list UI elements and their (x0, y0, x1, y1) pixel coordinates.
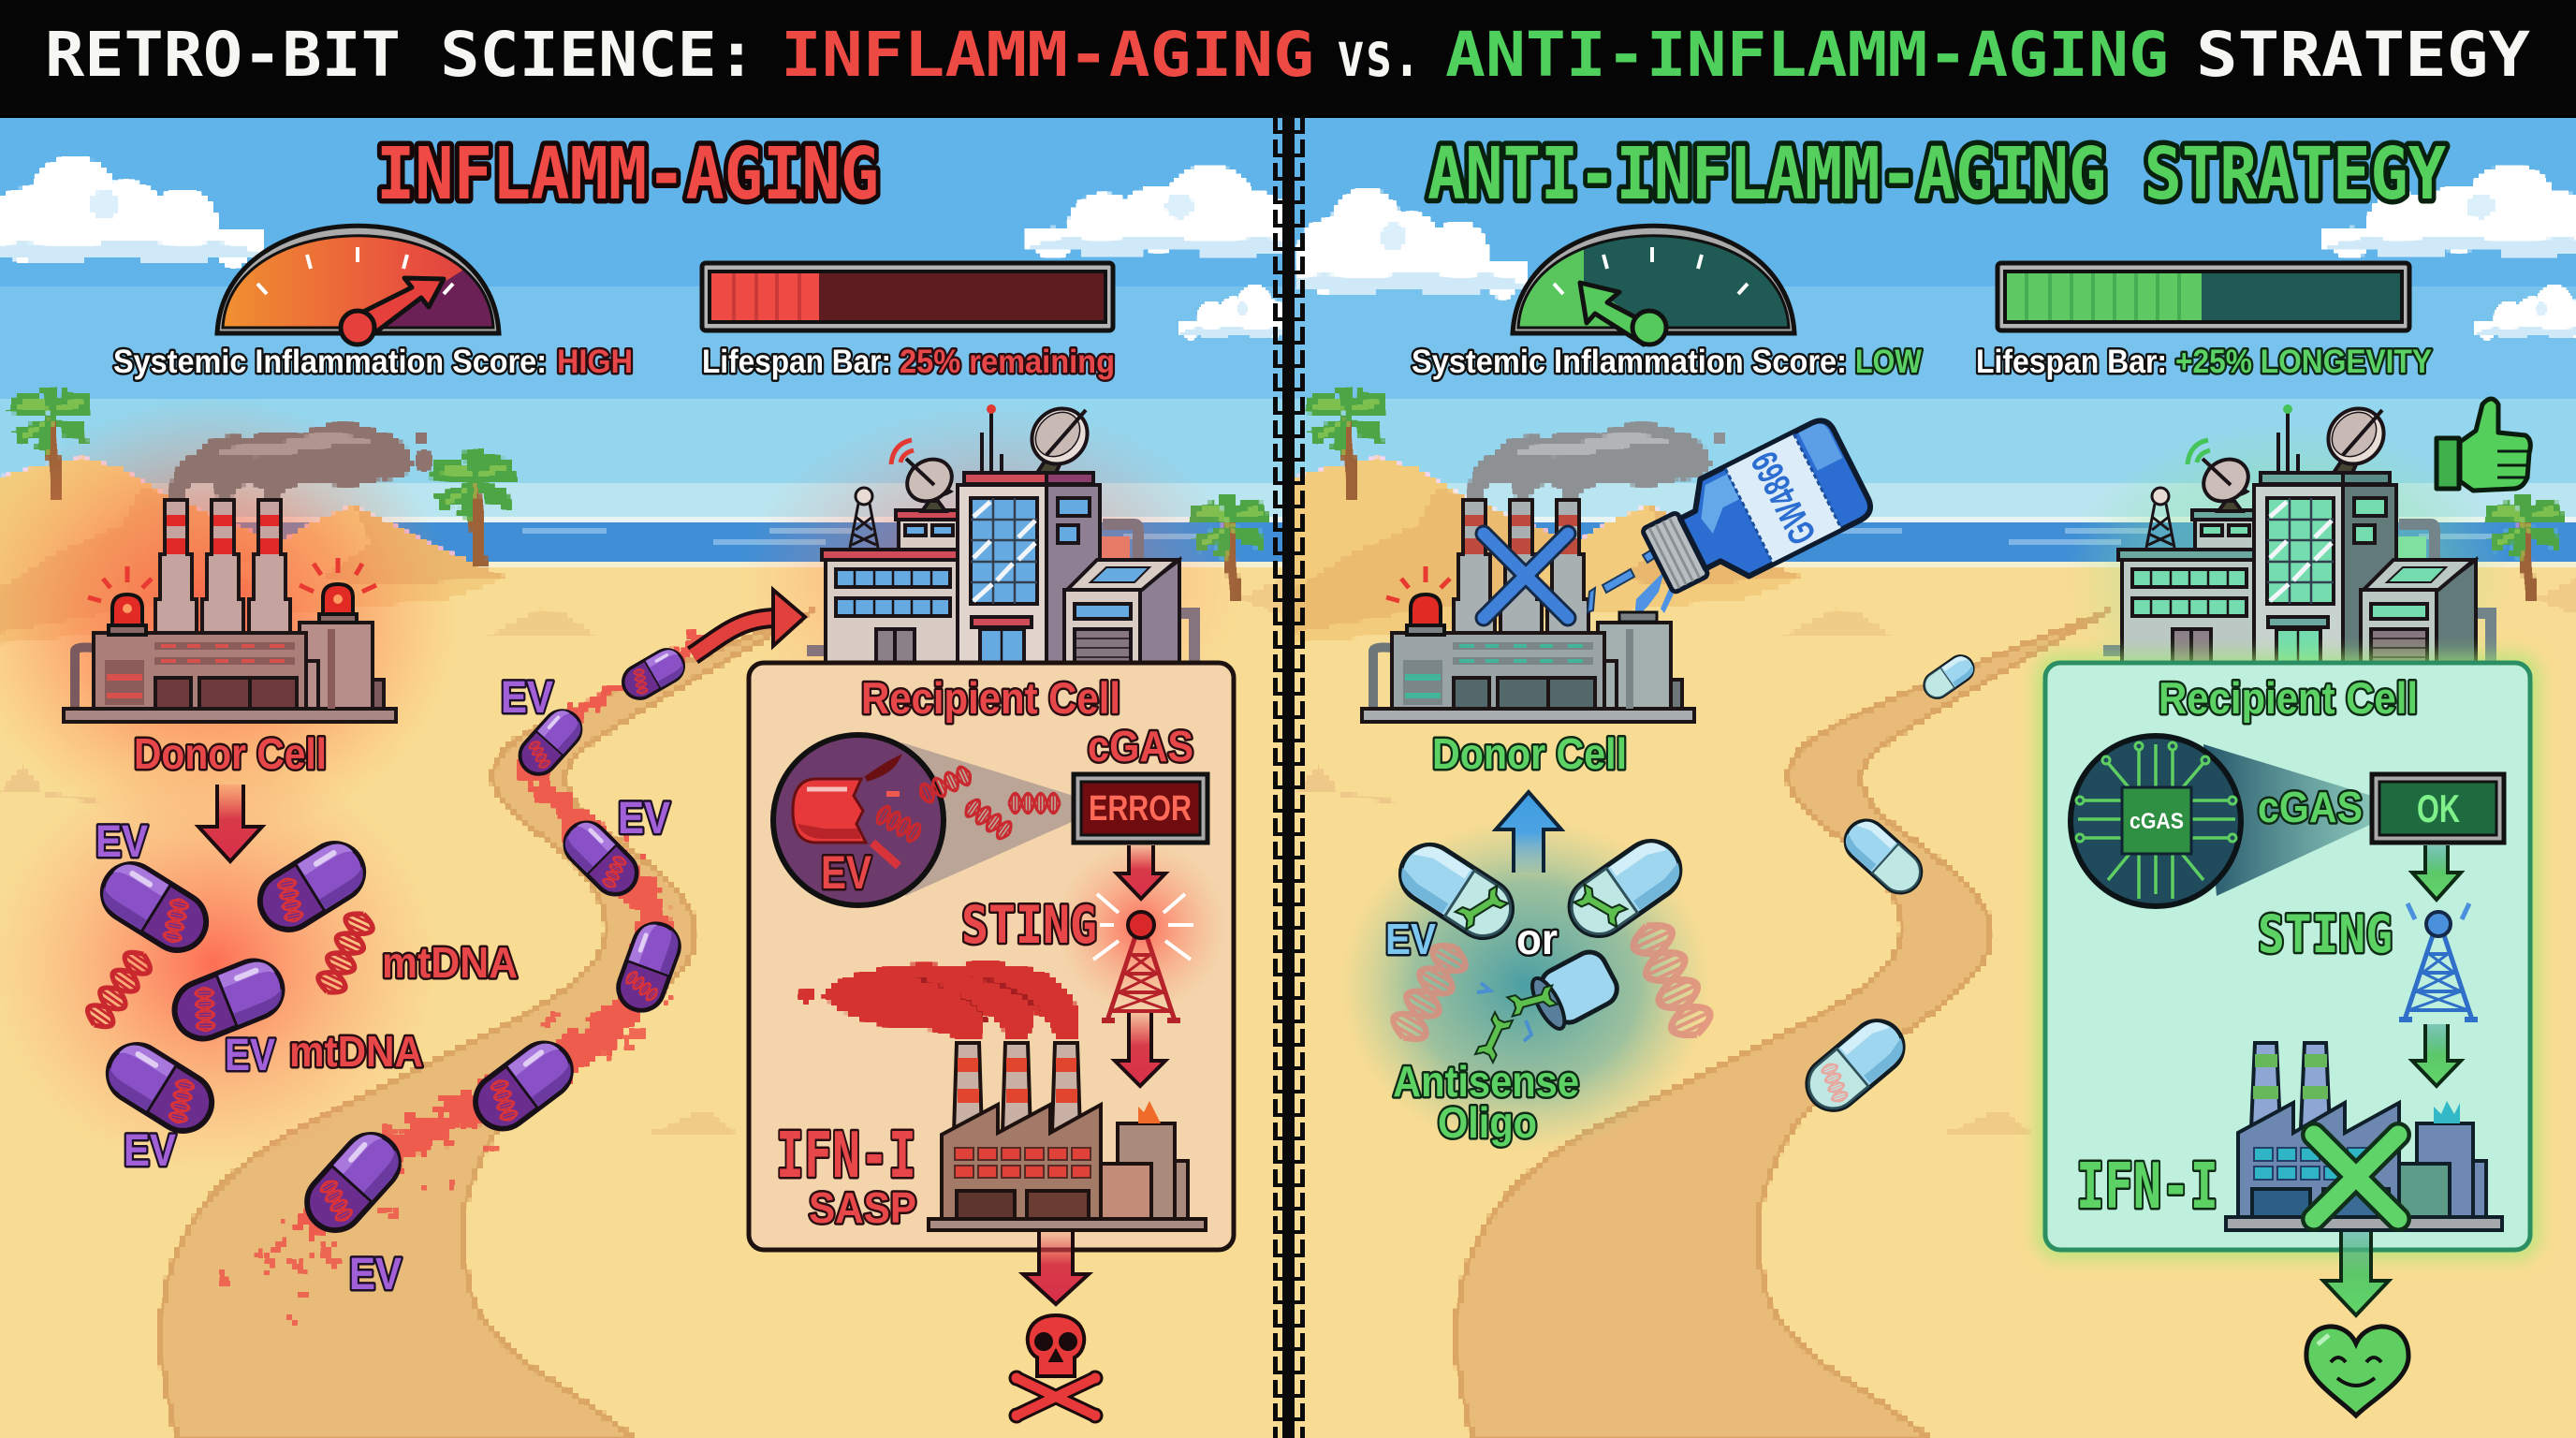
title (45, 19, 2530, 91)
travelling capsule (617, 643, 690, 705)
released mtDNA (1009, 794, 1060, 813)
capsule (249, 832, 374, 941)
zoom cone (2203, 744, 2372, 896)
lifespan bar +25% (1998, 263, 2409, 330)
EV and mtDNA labels: EV (618, 794, 670, 844)
cloud (1178, 285, 1288, 340)
label: EV: EV (1385, 915, 1436, 963)
STING tower (1093, 894, 1193, 1020)
label: donor cell: Donor Cell (1432, 729, 1627, 778)
gauge caption: HIGH (557, 344, 633, 380)
capsule with wrench (1390, 834, 1523, 948)
header bar (0, 0, 2576, 116)
arrow: treatment to donor (1496, 792, 1561, 873)
label: IFN-I: IFN-I (776, 1119, 916, 1192)
center divider (1271, 116, 1305, 1438)
faint mtDNA (1387, 938, 1471, 1047)
error panel: ERROR (1089, 789, 1192, 829)
arrow: factory to skull (1023, 1232, 1089, 1304)
label: or: or (1516, 915, 1558, 963)
beach background (1277, 116, 2576, 1438)
bottle label: GW4869 (1744, 445, 1824, 550)
arrow: donor to EVs (198, 785, 262, 861)
lifespan bar 25% (702, 263, 1113, 330)
arrow: to recipient cell (693, 590, 805, 655)
donor smoke (1469, 423, 1725, 499)
arrow: cGAS to STING (1117, 845, 1165, 899)
needle (1580, 283, 1666, 345)
alarm beacon (88, 566, 152, 635)
beach background (0, 116, 1310, 1438)
gauge: systemic inflammation low (1513, 213, 1794, 345)
label: recipient cell: Recipient Cell (2159, 673, 2418, 723)
capsule with wrench (1559, 829, 1691, 947)
cloud (2475, 285, 2576, 340)
STING tower (2399, 903, 2478, 1020)
EV trail (225, 640, 707, 1320)
label: donor cell: Donor Cell (134, 729, 327, 778)
travelling capsule (295, 1123, 411, 1242)
icon: thumbs up (2437, 399, 2530, 491)
donor smoke (170, 423, 433, 499)
label: cGAS: cGAS (2258, 783, 2363, 831)
arrow: factory to healthy heart (2323, 1232, 2389, 1315)
donor cell factory (1362, 500, 1694, 722)
travelling capsule (1919, 651, 1979, 703)
EV and mtDNA labels: EV (225, 1031, 275, 1080)
capsule (97, 1034, 223, 1142)
lifespan caption: 25% remaining (900, 344, 1115, 380)
released mtDNA (917, 764, 973, 805)
EV and mtDNA labels: mtDNA (382, 938, 518, 987)
lifespan caption: Lifespan Bar: (702, 344, 891, 380)
travelling capsule (611, 917, 686, 1018)
travelling capsule (464, 1032, 582, 1140)
label: IFN-I: IFN-I (2076, 1150, 2218, 1223)
cloud (2321, 165, 2576, 258)
EV and mtDNA labels: EV (501, 673, 553, 723)
arrow: STING to factory (1115, 1013, 1165, 1086)
engineered EV capsules (1387, 829, 1716, 1063)
title: INFLAMM-AGING (781, 19, 1314, 91)
green X: factory blocked (2314, 1135, 2398, 1219)
lifespan caption: Lifespan Bar: (1976, 344, 2167, 380)
faint mtDNA (1628, 917, 1716, 1043)
wrench (1475, 1012, 1513, 1063)
cloud (0, 156, 264, 267)
panel: anti-inflamm-aging (1277, 116, 2576, 1438)
cGAS chip inset: cGAS (2130, 809, 2184, 834)
label: antisense oligo: Antisense (1393, 1057, 1579, 1106)
travelling capsule (1796, 1010, 1914, 1121)
label: antisense oligo: Oligo (1438, 1098, 1537, 1147)
EV and mtDNA labels (95, 673, 670, 1299)
travelling capsule (512, 703, 589, 782)
red smoke (799, 961, 1076, 1041)
label: cGAS: cGAS (1088, 722, 1193, 770)
recipient cell building (807, 397, 1194, 665)
EV and mtDNA labels: EV (124, 1126, 176, 1176)
capsule (92, 853, 217, 961)
STING glow (1055, 841, 1227, 1013)
donor cell factory (64, 500, 396, 722)
travelling capsule (1837, 812, 1930, 902)
recipient glow (2064, 421, 2513, 740)
EV and mtDNA labels: mtDNA (289, 1027, 423, 1076)
label: STING: STING (961, 895, 1097, 955)
GW4869 bottle (1633, 416, 1875, 609)
blue X: stacks blocked (1484, 534, 1568, 618)
EV and mtDNA labels: EV (349, 1250, 402, 1299)
heading: inflamm-aging: INFLAMM-AGING (376, 133, 879, 216)
gauge caption: Systemic Inflammation Score: (113, 344, 547, 380)
lifespan caption (1976, 344, 2432, 380)
title: ANTI-INFLAMM-AGING (1445, 19, 2169, 91)
label: STING: STING (2258, 904, 2393, 964)
error panel (1074, 774, 1208, 843)
treatment glow (1339, 816, 1713, 1153)
needle (341, 278, 444, 345)
cloud (1295, 188, 1529, 299)
label: EV: EV (821, 846, 872, 899)
EV capsules with mtDNA (82, 643, 690, 1242)
wrench (1507, 986, 1558, 1016)
lifespan caption: +25% LONGEVITY (2175, 344, 2432, 380)
OK panel (2372, 774, 2504, 843)
arrow: cGAS to STING (2412, 845, 2461, 900)
capsule (166, 952, 291, 1048)
alarm beacon (1386, 566, 1450, 635)
recipient cell building (2103, 397, 2491, 665)
alarm beacon (300, 558, 376, 623)
label: antisense oligo (1393, 1057, 1579, 1147)
opened capsule (1526, 946, 1623, 1034)
title: STRATEGY (2196, 19, 2530, 91)
gauge caption: LOW (1855, 344, 1922, 380)
inflammation glows (0, 398, 1245, 1175)
droplets from bottle (1588, 548, 1676, 622)
gauge: systemic inflammation high (217, 225, 505, 345)
heading: anti-inflamm-aging strategy: ANTI-INFLAMM-AGING STRATEGY (1427, 133, 2447, 216)
icon: smiling heart (2306, 1327, 2408, 1416)
gauge caption: Systemic Inflammation Score: (1412, 344, 1847, 380)
OK panel: OK (2417, 786, 2460, 830)
antisense fragments (1477, 983, 1531, 1041)
mtDNA strand (82, 946, 155, 1034)
label: recipient cell: Recipient Cell (861, 673, 1120, 723)
released mtDNA (962, 797, 1015, 842)
title: vs. (1337, 19, 1421, 91)
travelling capsule (556, 814, 646, 903)
zoom cone (901, 742, 1074, 896)
cGAS chip inset (2071, 736, 2241, 906)
recipient cell box (749, 663, 1234, 1250)
arrow: STING to factory (2412, 1024, 2461, 1086)
label: SASP: SASP (809, 1183, 916, 1232)
factory: IFN-I SASP (929, 1043, 1206, 1230)
factory: IFN-I blocked (2226, 1043, 2502, 1230)
recipient cell box (2037, 654, 2539, 1258)
palm tree (430, 450, 516, 565)
cloud (1024, 165, 1292, 258)
EV and mtDNA labels: EV (95, 817, 148, 867)
icon: skull and crossbones (1010, 1315, 1102, 1422)
title: RETRO-BIT SCIENCE: (45, 19, 756, 91)
EV rupture inset (773, 735, 944, 905)
panel: inflamm-aging (0, 116, 1310, 1438)
lifespan caption (702, 344, 1115, 380)
mtDNA strand (314, 908, 377, 998)
